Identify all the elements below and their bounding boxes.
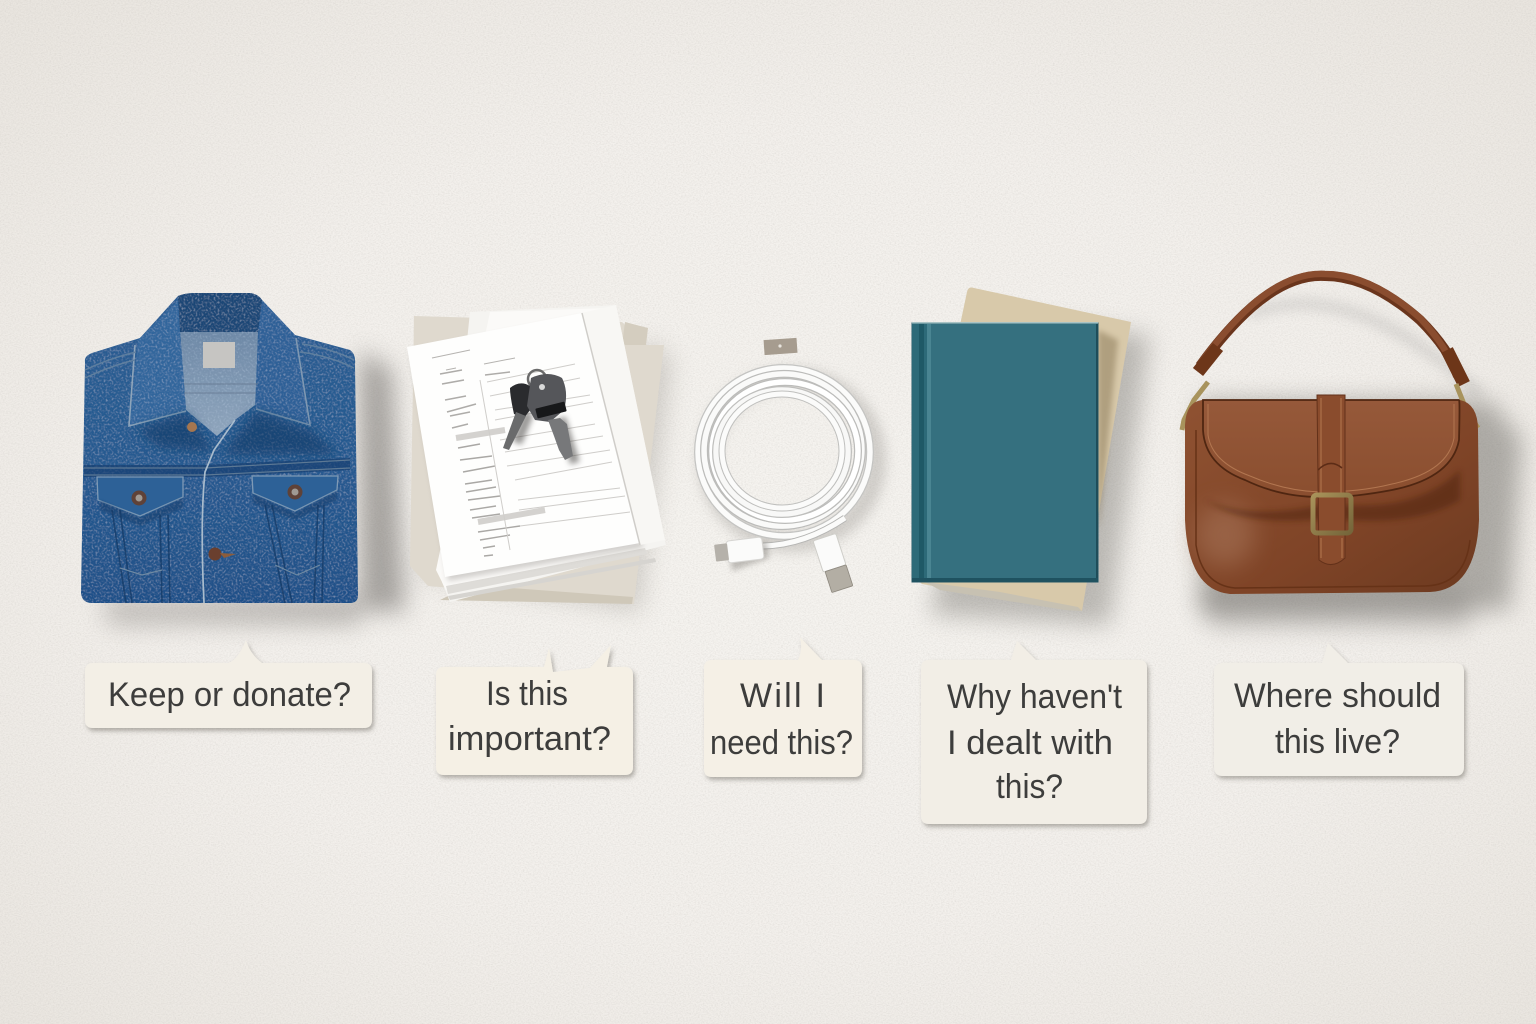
white sheets — [407, 305, 666, 602]
bag handle — [1198, 274, 1464, 384]
teal book — [912, 322, 1098, 582]
tan folders — [410, 316, 664, 604]
speech bubble: Will I need this?: Will I — [740, 677, 825, 715]
speech bubble: Will I need this? — [704, 637, 862, 777]
speech bubble: Where should this live?: Where should — [1234, 677, 1441, 715]
bag body — [1185, 400, 1479, 594]
jacket neck label — [203, 342, 235, 368]
speech bubble: Will I need this?: need this? — [710, 724, 853, 762]
bag flap — [1203, 400, 1460, 497]
jacket buttons — [132, 422, 302, 560]
item: teal book on tan notebook — [912, 288, 1150, 625]
tan notebook — [915, 288, 1131, 611]
keys — [503, 370, 575, 463]
bag buckle — [1313, 495, 1351, 533]
form lines — [432, 350, 630, 556]
cable clip — [764, 338, 798, 355]
speech bubble: Where should this live?: this live? — [1275, 723, 1400, 761]
speech bubble: Keep or donate?: Keep or donate? — [108, 676, 351, 714]
speech bubble: Why haven't I dealt with this? — [921, 641, 1147, 824]
speech bubble: Why haven't I dealt with this?: Why haven't — [947, 678, 1123, 716]
usb connector left — [714, 537, 769, 571]
speech bubble: Is this important?: important? — [448, 720, 611, 758]
bag hardware — [1182, 382, 1478, 430]
bag strap — [1317, 395, 1345, 565]
speech bubble: Keep or donate? — [85, 640, 372, 728]
speech bubble: Why haven't I dealt with this?: this? — [996, 768, 1063, 806]
item: brown leather bag — [1182, 274, 1522, 628]
usb connector right — [813, 533, 853, 593]
speech bubble: Where should this live? — [1214, 643, 1464, 776]
item: stack of papers with keys — [407, 305, 672, 612]
speech bubble: Is this important?: Is this — [486, 675, 568, 713]
item: folded denim jacket — [81, 293, 405, 626]
speech bubble: Why haven't I dealt with this?: I dealt with — [947, 724, 1113, 762]
speech bubble: Is this important? — [436, 645, 633, 775]
item: coiled white cable — [694, 338, 876, 593]
